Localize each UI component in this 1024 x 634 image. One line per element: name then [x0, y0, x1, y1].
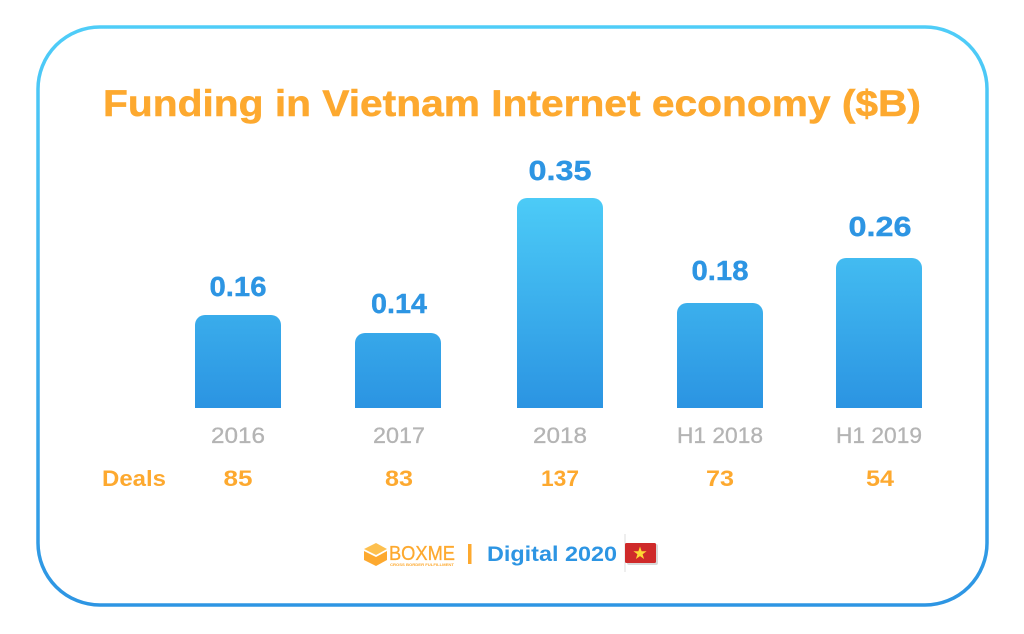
axis labels: H1 2018	[677, 423, 763, 448]
icon: box logo	[364, 543, 387, 566]
divider	[468, 544, 472, 564]
deals row: 73	[706, 466, 734, 491]
deals row: 85	[224, 466, 252, 491]
bar: 2016: 0.16	[210, 271, 266, 302]
bar: 2016	[195, 271, 281, 408]
logo tagline: CROSS BORDER FULFILLMENT	[390, 562, 455, 567]
deals row: 54	[866, 466, 895, 491]
bar: H1 2018	[677, 255, 763, 408]
bar: 2017	[355, 288, 441, 408]
deals row: Deals	[102, 466, 166, 491]
bar: 2018	[517, 155, 603, 408]
deals row: 83	[385, 466, 413, 491]
icon: Vietnam flag	[624, 534, 658, 572]
axis labels: H1 2019	[836, 423, 922, 448]
bar: 2017: 0.14	[371, 288, 427, 319]
footer: branding	[364, 534, 658, 572]
axis labels: 2016	[211, 423, 265, 448]
title: Funding in Vietnam Internet economy ($B)	[103, 83, 921, 124]
logo wordmark: BOXME	[389, 543, 455, 565]
deals row: 137	[541, 466, 579, 491]
bar chart	[195, 155, 922, 408]
bar: H1 2019: 0.26	[848, 211, 912, 242]
footer text: Digital 2020	[487, 543, 617, 566]
axis labels: 2018	[533, 423, 587, 448]
axis labels: 2017	[373, 423, 425, 448]
axis labels	[211, 423, 922, 448]
bar: 2018: 0.35	[528, 155, 592, 186]
bar: H1 2018: 0.18	[692, 255, 748, 286]
bar: H1 2019	[836, 211, 922, 408]
deals row	[102, 466, 895, 491]
